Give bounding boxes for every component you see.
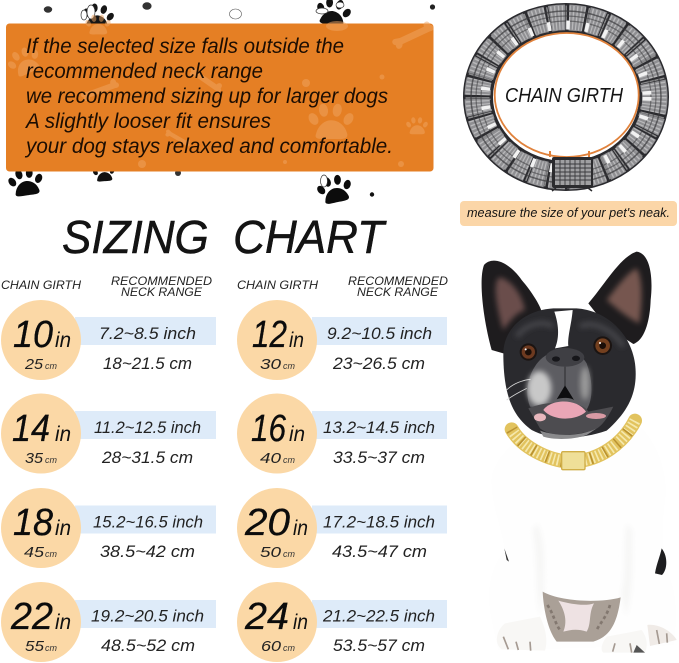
size row: 18 in: 38.5~42 cm xyxy=(100,542,195,561)
size row: 12 in: in xyxy=(289,329,304,352)
size row: 22 in xyxy=(1,582,216,662)
banner text: recommended neck range xyxy=(26,60,263,83)
size row: 16 in: in xyxy=(289,423,305,446)
size row: 10 in: 18~21.5 cm xyxy=(103,354,192,373)
column headers: CHAIN GIRTH xyxy=(237,278,318,292)
size row: 10 in: 7.2~8.5 inch xyxy=(99,324,196,343)
title: SIZING CHART xyxy=(62,211,387,263)
size row: 14 in: in xyxy=(55,423,71,446)
size row: 18 in: 15.2~16.5 inch xyxy=(93,512,203,532)
clasp xyxy=(550,151,593,191)
size row: 12 in: 9.2~10.5 inch xyxy=(327,324,432,343)
size row: 12 in: cm xyxy=(283,361,296,371)
column headers: CHAIN GIRTH xyxy=(1,278,81,292)
size row: 20 in: 43.5~47 cm xyxy=(332,542,427,561)
size row: 14 in: 14 xyxy=(12,408,50,450)
size row: 24 in: 21.2~22.5 inch xyxy=(322,606,435,626)
callout: measure caption: measure the size of your pet's neak. xyxy=(467,206,670,220)
size row: 16 in: 16 xyxy=(251,408,287,450)
size row: 10 in: 10 xyxy=(13,314,53,356)
size row: 10 in: 25 xyxy=(24,356,44,373)
size row: 24 in: 60 xyxy=(261,638,282,655)
dog eyes xyxy=(520,336,612,361)
illustration: French bulldog wearing gold chain xyxy=(482,252,677,653)
column headers xyxy=(1,274,448,299)
chain ring xyxy=(471,11,661,183)
gold chain collar xyxy=(512,421,635,470)
banner text: your dog stays relaxed and comfortable. xyxy=(24,135,393,158)
size row: 18 in: 18 xyxy=(13,502,53,544)
size row: 12 in: 23~26.5 cm xyxy=(332,354,425,373)
size row: 18 in: in xyxy=(55,517,71,540)
size row: 14 in: 11.2~12.5 inch xyxy=(94,418,201,437)
size row: 20 in: in xyxy=(293,517,308,540)
column headers: NECK RANGE xyxy=(357,285,439,299)
column headers: NECK RANGE xyxy=(121,285,203,299)
size row: 22 in: 22 xyxy=(10,596,53,638)
size row: 22 in: 48.5~52 cm xyxy=(101,636,195,655)
background paw prints and dots xyxy=(5,0,435,206)
size row: 20 in: 17.2~18.5 inch xyxy=(323,512,435,532)
size row: 14 in: cm xyxy=(45,455,58,465)
dog body xyxy=(489,423,676,650)
size row: 12 in xyxy=(237,300,447,380)
dog ears xyxy=(482,252,652,353)
size row: 14 in xyxy=(1,394,216,474)
size row: 16 in xyxy=(237,394,447,474)
size row: 18 in: cm xyxy=(45,549,58,559)
size row: 12 in: 30 xyxy=(260,356,282,373)
dog paws xyxy=(497,617,677,653)
chain girth label: CHAIN GIRTH xyxy=(505,85,624,107)
size row: 16 in: 40 xyxy=(260,450,282,467)
faint paw and bone pattern xyxy=(3,14,436,168)
size row: 16 in: 13.2~14.5 inch xyxy=(323,418,435,437)
size row: 10 in: cm xyxy=(45,361,58,371)
size row: 16 in: 33.5~37 cm xyxy=(333,448,425,467)
size row: 24 in xyxy=(237,582,447,662)
size row: 20 in xyxy=(237,488,447,568)
size row: 24 in: 53.5~57 cm xyxy=(333,636,425,655)
banner text: A slightly looser fit ensures xyxy=(24,110,271,133)
size row: 24 in: cm xyxy=(283,643,296,653)
chain girth diagram xyxy=(471,11,661,191)
banner text: If the selected size falls outside the xyxy=(26,35,344,58)
column headers: RECOMMENDED xyxy=(111,274,212,288)
size row: 22 in: 55 xyxy=(25,638,45,655)
banner text xyxy=(24,35,393,158)
inner white area with orange measuring line xyxy=(495,33,639,157)
dog head xyxy=(503,308,636,439)
size row: 12 in: 12 xyxy=(252,314,287,356)
size row: 10 in: in xyxy=(55,329,71,352)
banner text: we recommend sizing up for larger dogs xyxy=(26,85,388,108)
size row: 24 in: 24 xyxy=(244,596,289,638)
size row: 22 in: 19.2~20.5 inch xyxy=(91,606,204,626)
size row: 18 in xyxy=(1,488,216,568)
size row: 24 in: in xyxy=(293,611,308,634)
size row: 20 in: 20 xyxy=(244,502,290,544)
column headers: RECOMMENDED xyxy=(348,274,448,288)
size row: 22 in: in xyxy=(55,611,71,634)
size row: 18 in: 45 xyxy=(24,544,45,561)
size row: 20 in: 50 xyxy=(260,544,282,561)
size row: 22 in: cm xyxy=(45,643,58,653)
panel: orange sizing advice banner xyxy=(3,14,436,171)
size row: 10 in xyxy=(1,300,216,380)
size row: 16 in: cm xyxy=(283,455,296,465)
callout: measure caption xyxy=(460,201,677,226)
dog belly patch xyxy=(543,592,621,642)
size row: 20 in: cm xyxy=(283,549,296,559)
size row: 14 in: 35 xyxy=(25,450,44,467)
size row: 14 in: 28~31.5 cm xyxy=(101,448,193,467)
